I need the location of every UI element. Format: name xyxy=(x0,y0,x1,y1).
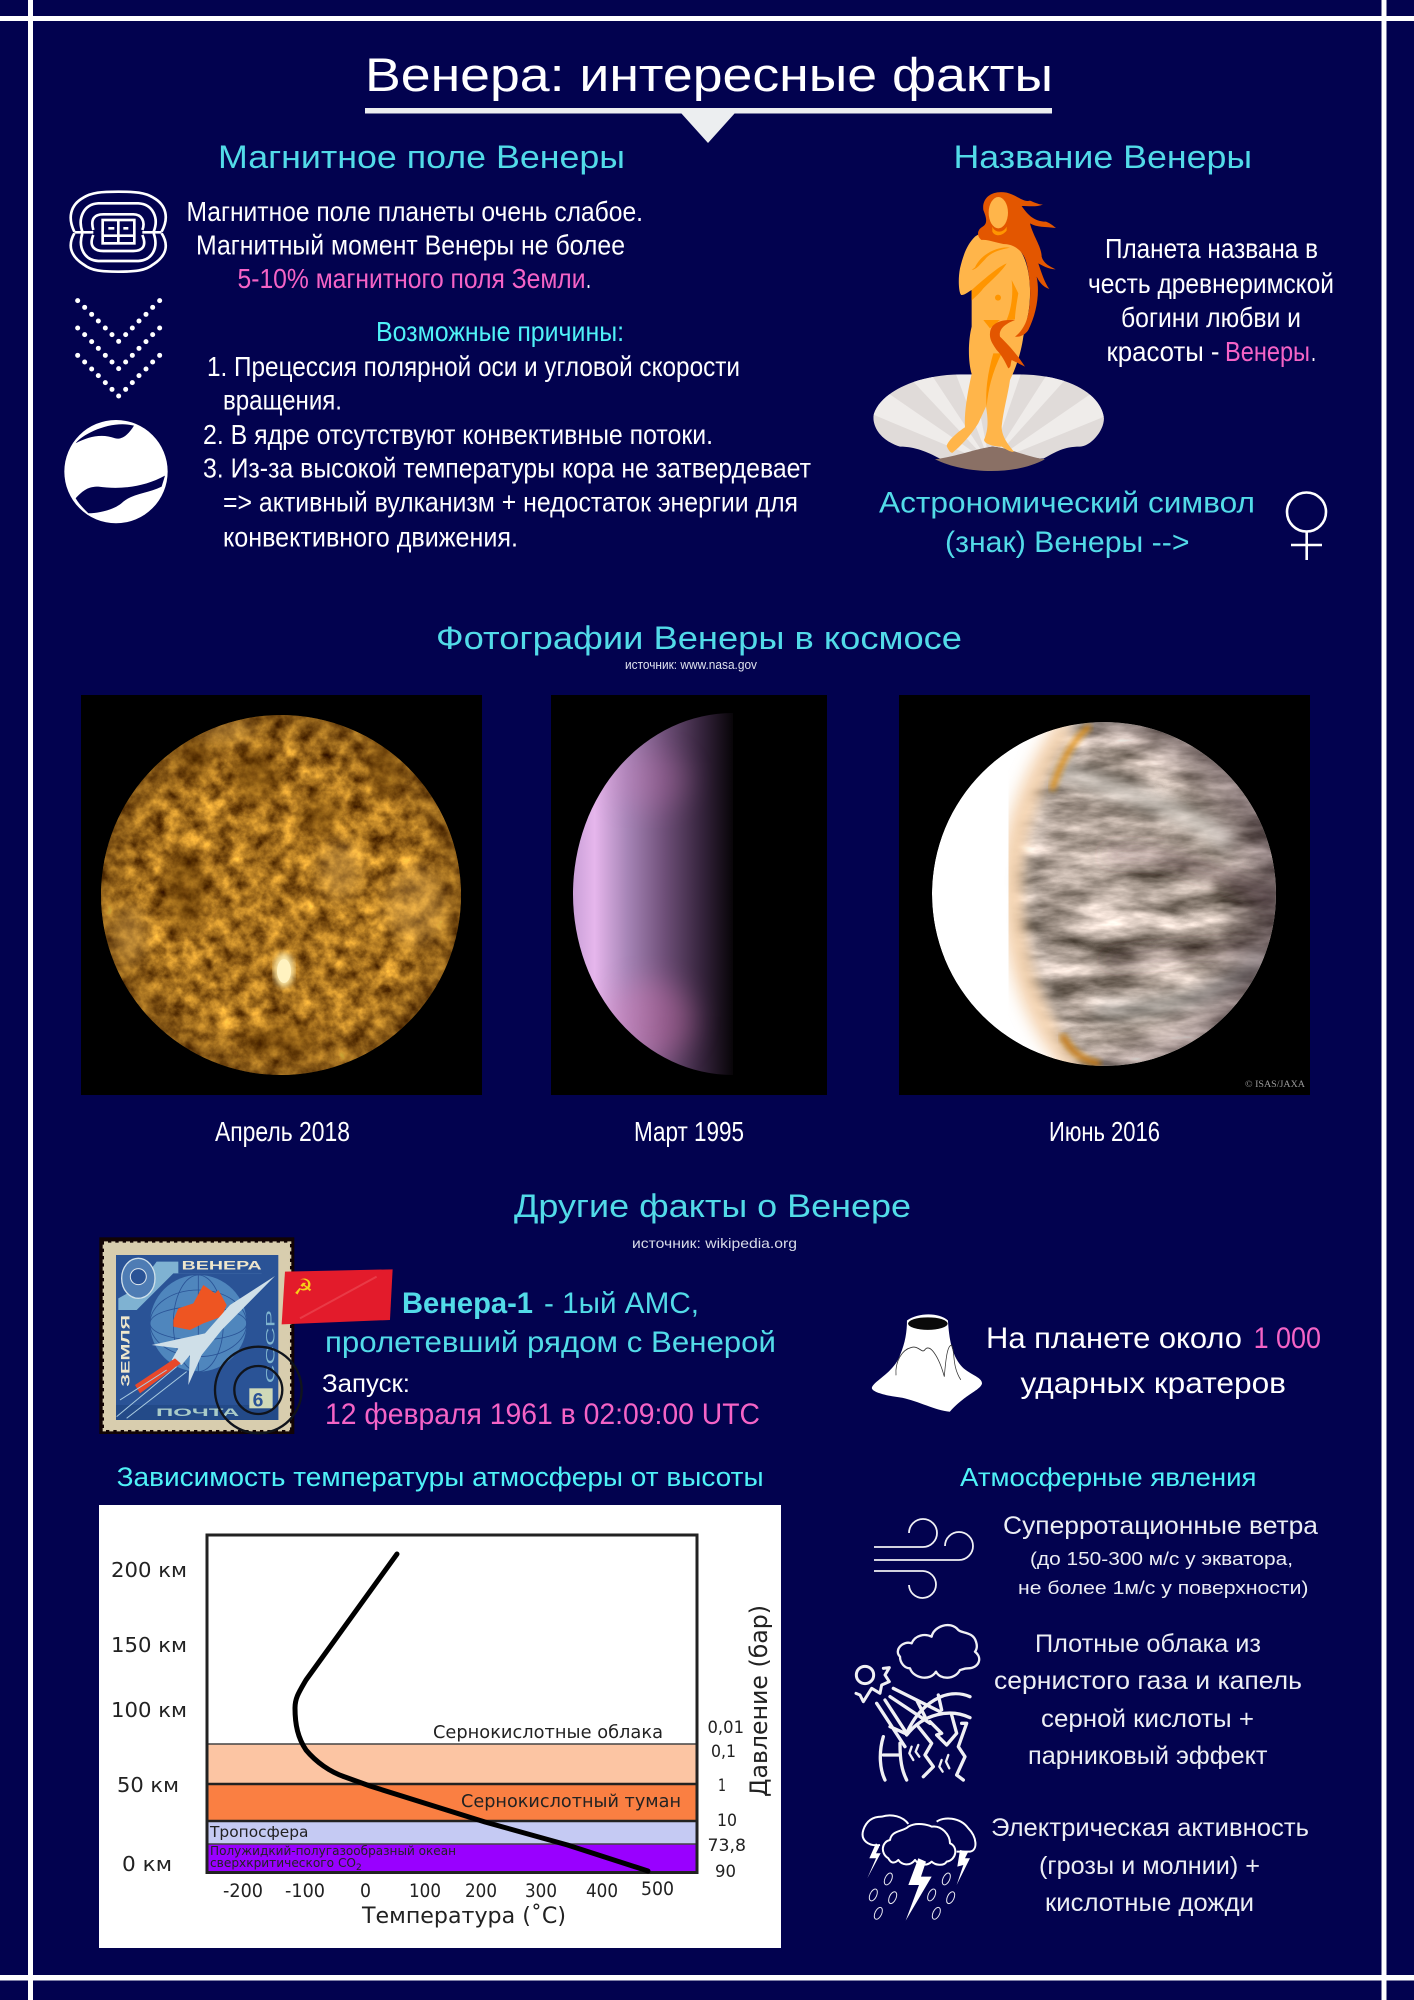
heading: phenomena: Атмосферные явления xyxy=(960,1462,1256,1492)
chart: altitude axis: 50 км xyxy=(117,1773,179,1797)
source: nasa: источник: www.nasa.gov xyxy=(625,658,758,672)
chart: temperature axis xyxy=(223,1878,674,1929)
chart: temperature axis: -200 xyxy=(223,1880,263,1902)
credit: © ISAS/JAXA xyxy=(1245,1079,1305,1090)
chart: pressure axis: Давление (бар) xyxy=(745,1605,773,1797)
text: naming xyxy=(1088,233,1334,367)
captions: photo dates: Июнь 2016 xyxy=(1049,1116,1160,1147)
chart: band labels: Сернокислотные облака xyxy=(433,1722,663,1743)
panel: temperature chart xyxy=(99,1462,781,1948)
chart: temperature axis: 500 xyxy=(641,1878,674,1900)
text: craters: ударных кратеров xyxy=(1020,1367,1286,1400)
panel: name of Venus xyxy=(870,139,1334,560)
stamp: emblem xyxy=(122,1258,155,1298)
text: winds: не более 1м/с у поверхности) xyxy=(1018,1577,1308,1598)
chart: pressure axis: 1 xyxy=(718,1776,726,1796)
chart: band labels xyxy=(209,1722,681,1873)
text: Venera-1: 12 февраля 1961 в 02:09:00 UTC xyxy=(325,1398,760,1431)
list: causes: 1. Прецессия полярной оси и угловой скорости xyxy=(207,351,740,382)
text: electrical activity: (грозы и молнии) + xyxy=(1039,1852,1260,1880)
text: weak field: Магнитный момент Венеры не более xyxy=(196,230,625,260)
chart: temperature axis: Температура (˚С) xyxy=(361,1904,566,1929)
heading: name: Название Венеры xyxy=(954,139,1252,175)
text: craters: На планете около xyxy=(986,1322,1242,1355)
chart: band labels: сверхкритического CO xyxy=(210,1856,356,1870)
captions: photo dates xyxy=(215,1116,1160,1147)
list: causes: 3. Из-за высокой температуры кора не затвердевает xyxy=(203,453,811,484)
panel: other facts xyxy=(99,1188,1321,1434)
text: winds xyxy=(1003,1512,1318,1598)
text: clouds: сернистого газа и капель xyxy=(994,1667,1302,1695)
list: causes: 2. В ядре отсутствуют конвективные потоки. xyxy=(203,419,713,450)
image: Venera-1 stamp: СССР xyxy=(263,1310,277,1383)
text: Venera-1: - 1ый АМС, xyxy=(544,1287,699,1320)
chart: temperature axis: 100 xyxy=(409,1880,441,1902)
photo: April 2018 xyxy=(81,695,482,1095)
text: weak field: Магнитное поле планеты очень слабое. xyxy=(186,196,643,227)
chart: pressure axis: 73,8 xyxy=(708,1836,746,1856)
heading: magnetic field: Магнитное поле Венеры xyxy=(218,139,625,175)
chart: band labels: Полужидкий-полугазообразный океан xyxy=(210,1844,456,1858)
list: causes: конвективного движения. xyxy=(223,522,518,552)
photo: March 1995 xyxy=(551,695,827,1095)
text: electrical activity: Электрическая активность xyxy=(991,1814,1309,1842)
text: Venera-1: пролетевший рядом с Венерой xyxy=(325,1326,776,1359)
text: clouds: Плотные облака из xyxy=(1035,1630,1261,1658)
text: astronomical symbol xyxy=(879,487,1255,559)
heading: chart: Зависимость температуры атмосферы от высоты xyxy=(117,1462,764,1492)
image: Venera-1 stamp: 6 xyxy=(253,1391,264,1412)
text: weak field xyxy=(186,196,643,294)
chart: temperature axis: 300 xyxy=(525,1880,557,1902)
stamp: postmark xyxy=(215,1347,302,1433)
stamp: globe xyxy=(150,1275,247,1372)
chart: temperature vs altitude xyxy=(99,1505,781,1948)
list: causes: вращения. xyxy=(223,384,342,416)
chart: band labels: Сернокислотный туман xyxy=(461,1791,681,1812)
chart: temperature curve xyxy=(295,1554,648,1871)
source: wikipedia: источник: wikipedia.org xyxy=(632,1235,797,1251)
chart: pressure axis: 90 xyxy=(715,1862,736,1882)
title: Венера: интересные факты xyxy=(365,48,1053,101)
list: causes: => активный вулканизм + недостаток энергии для xyxy=(223,487,798,518)
text: craters: 1 000 xyxy=(1254,1322,1321,1355)
text: clouds: серной кислоты + xyxy=(1041,1705,1254,1733)
chart: altitude axis: 150 км xyxy=(111,1633,187,1657)
text: winds: (до 150-300 м/с у экватора, xyxy=(1030,1548,1293,1569)
text: naming: Венеры xyxy=(1225,336,1310,367)
panel: magnetic field xyxy=(64,139,811,552)
chart: pressure axis: 0,01 xyxy=(708,1718,744,1738)
icon: volcano xyxy=(872,1314,982,1412)
stamp: rocket xyxy=(152,1276,275,1385)
text: astronomical symbol: (знак) Венеры --> xyxy=(945,526,1190,559)
captions: photo dates: Март 1995 xyxy=(634,1116,744,1147)
chart: band labels: 2 xyxy=(356,1863,362,1873)
text: craters xyxy=(986,1322,1321,1400)
text: clouds: парниковый эффект xyxy=(1028,1742,1268,1770)
text: winds: Суперротационные ветра xyxy=(1003,1512,1318,1540)
icon: Soviet flag: ☭ xyxy=(293,1275,313,1300)
text: naming: богини любви и xyxy=(1121,302,1301,333)
chart: altitude axis: 0 км xyxy=(122,1852,172,1876)
text: clouds xyxy=(994,1630,1302,1770)
text: naming: . xyxy=(1311,336,1316,367)
text: Venera-1 xyxy=(322,1287,776,1431)
icon: magnetic field xyxy=(71,192,166,272)
icon: wind xyxy=(874,1519,973,1598)
chart: altitude axis: 100 км xyxy=(111,1698,187,1722)
icon: planet xyxy=(64,420,168,523)
icon: dotted chevrons xyxy=(75,298,162,398)
captions: photo dates: Апрель 2018 xyxy=(215,1116,350,1147)
text: naming: Планета названа в xyxy=(1105,233,1318,264)
heading: other facts: Другие факты о Венере xyxy=(514,1188,911,1224)
chart: temperature axis: 200 xyxy=(465,1880,497,1902)
text: naming: красоты - xyxy=(1106,336,1220,367)
panel: photos of Venus xyxy=(81,620,1310,1147)
image: Venera-1 stamp: ЗЕМЛЯ xyxy=(118,1315,132,1387)
chart: altitude axis xyxy=(111,1558,187,1876)
photo: June 2016 xyxy=(899,695,1310,1095)
text: naming: честь древнеримской xyxy=(1088,268,1334,299)
stamp: lettering: ВЕНЕРА xyxy=(182,1258,262,1272)
text: Venera-1: Запуск: xyxy=(322,1370,410,1398)
text: weak field: 5-10% магнитного поля Земли xyxy=(238,263,586,294)
text: weak field: . xyxy=(586,263,591,294)
chart: pressure axis xyxy=(708,1605,773,1882)
chart: pressure axis: 10 xyxy=(717,1811,737,1831)
text: astronomical symbol: Астрономический символ xyxy=(879,487,1255,520)
image: Venera-1 stamp xyxy=(99,1237,302,1434)
list: causes xyxy=(203,351,811,552)
icon: storm xyxy=(863,1815,975,1921)
heading: photos: Фотографии Венеры в космосе xyxy=(436,620,962,656)
title xyxy=(365,48,1053,143)
chart: altitude axis: 200 км xyxy=(111,1558,187,1582)
icon: Soviet flag xyxy=(282,1269,393,1324)
chart: temperature axis: 0 xyxy=(360,1880,371,1902)
icon: Venus symbol xyxy=(1287,492,1326,560)
text: electrical activity: кислотные дожди xyxy=(1045,1889,1254,1917)
text: electrical activity xyxy=(991,1814,1309,1917)
icon: clouds and greenhouse xyxy=(856,1625,979,1780)
image: Venera-1 stamp: ПОЧТА xyxy=(156,1407,239,1419)
panel: atmospheric phenomena xyxy=(856,1462,1318,1921)
chart: band labels: Тропосфера xyxy=(209,1823,308,1841)
heading: possible causes: Возможные причины: xyxy=(376,316,624,347)
illustration: Venus on a shell xyxy=(870,192,1110,471)
chart: pressure axis: 0,1 xyxy=(711,1742,736,1762)
chart: temperature axis: -100 xyxy=(285,1880,325,1902)
chart: atmospheric bands xyxy=(206,1744,697,1873)
chart: temperature axis: 400 xyxy=(586,1880,618,1902)
text: Venera-1: Венера-1 xyxy=(402,1287,533,1320)
